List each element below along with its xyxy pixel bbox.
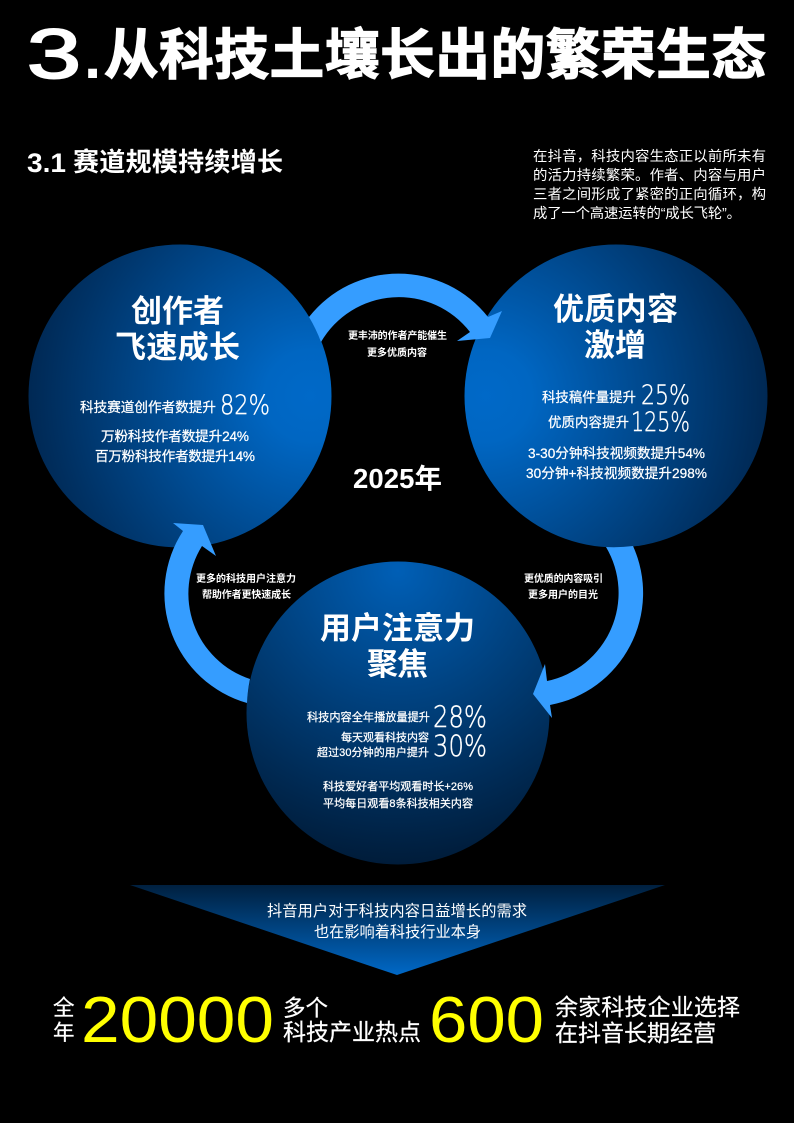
intro paragraph [533, 148, 766, 222]
intro paragraph: 的活力持续繁荣。作者、内容与用户 [533, 167, 766, 184]
intro paragraph: 成了一个高速运转的“成长飞轮”。 [533, 205, 741, 222]
stat: 20000 hot topics: 年 [53, 1021, 75, 1045]
title: 3 [27, 15, 81, 93]
center year label: 2025年 [353, 463, 442, 494]
stat: 20000 hot topics: 科技产业热点 [283, 1019, 421, 1045]
stat: 600 companies: 600 [429, 983, 544, 1056]
stats: user attention: 超过30分钟的用户提升 [317, 745, 429, 759]
caption: top arrow: 更丰沛的作者产能催生 [348, 329, 447, 342]
stats: content: 25% [641, 380, 690, 411]
stat: 20000 hot topics: 多个 [283, 996, 328, 1021]
circle: user attention [246, 562, 550, 864]
stat: 20000 hot topics: 20000 [81, 983, 274, 1056]
heading: content: 优质内容 [553, 292, 678, 327]
circle: creators [28, 244, 332, 548]
stats: content [526, 380, 707, 481]
intro paragraph: 在抖音，科技内容生态正以前所未有 [533, 148, 766, 165]
stats: content: 科技稿件量提升 [542, 390, 636, 405]
section heading: 赛道规模持续增长 [73, 147, 283, 177]
stats: user attention: 30% [433, 729, 487, 763]
stats: content: 125% [631, 407, 690, 438]
caption: left arrow: 帮助作者更快速成长 [202, 588, 291, 601]
heading: user attention [320, 611, 475, 682]
circle: content [464, 244, 768, 548]
stats: creators: 科技赛道创作者数提升 [80, 400, 216, 415]
heading: content: 激增 [584, 328, 646, 363]
stats: user attention: 科技爱好者平均观看时长+26% [323, 779, 473, 793]
heading: creators [115, 294, 240, 365]
intro paragraph: 三者之间形成了紧密的正向循环，构 [533, 186, 766, 203]
title: . [84, 23, 101, 92]
stats: user attention: 28% [433, 700, 487, 734]
banner: downward triangle: 也在影响着科技行业本身 [314, 924, 481, 941]
banner: downward triangle: 抖音用户对于科技内容日益增长的需求 [267, 903, 527, 920]
arrow: users to creators [164, 523, 250, 703]
panel: user attention text [307, 611, 487, 810]
stat: 600 companies [429, 983, 740, 1056]
banner: downward triangle [130, 885, 665, 975]
caption: right arrow: 更优质的内容吸引 [524, 572, 603, 585]
heading: content [553, 292, 678, 363]
arrow: creators to content [309, 274, 502, 342]
stats: creators: 万粉科技作者数提升24% [101, 429, 249, 444]
panel: creators text [80, 294, 270, 464]
stat: 20000 hot topics [53, 983, 421, 1056]
stats: content: 3-30分钟科技视频数提升54% [528, 445, 705, 461]
stats: creators [80, 390, 270, 464]
section heading: 3.1 [27, 148, 66, 178]
stats: content: 优质内容提升 [548, 414, 629, 430]
stat: 20000 hot topics: 全 [53, 996, 75, 1020]
stat: 600 companies: 余家科技企业选择 [555, 994, 740, 1020]
caption: top arrow [348, 329, 447, 359]
panel: content text [526, 292, 707, 481]
stats: user attention [307, 700, 487, 810]
caption: left arrow: 更多的科技用户注意力 [196, 572, 296, 585]
stats: content: 30分钟+科技视频数提升298% [526, 465, 707, 481]
caption: left arrow [196, 572, 296, 601]
title: 从科技土壤长出的繁荣生态 [104, 25, 766, 86]
stats: creators: 百万粉科技作者数提升14% [95, 449, 255, 464]
caption: right arrow [524, 572, 603, 601]
caption: top arrow: 更多优质内容 [367, 346, 427, 359]
stats: user attention: 科技内容全年播放量提升 [307, 710, 430, 724]
heading: user attention: 用户注意力 [320, 611, 475, 646]
stat: 600 companies: 在抖音长期经营 [555, 1020, 716, 1046]
heading: creators: 创作者 [131, 294, 224, 329]
arrow: content to users [533, 546, 643, 718]
heading: user attention: 聚焦 [367, 647, 428, 682]
stats: creators: 82% [220, 390, 270, 421]
stats: user attention: 每天观看科技内容 [341, 730, 429, 744]
caption: right arrow: 更多用户的目光 [528, 588, 598, 601]
heading: creators: 飞速成长 [115, 330, 240, 365]
stats: user attention: 平均每日观看8条科技相关内容 [323, 796, 473, 810]
